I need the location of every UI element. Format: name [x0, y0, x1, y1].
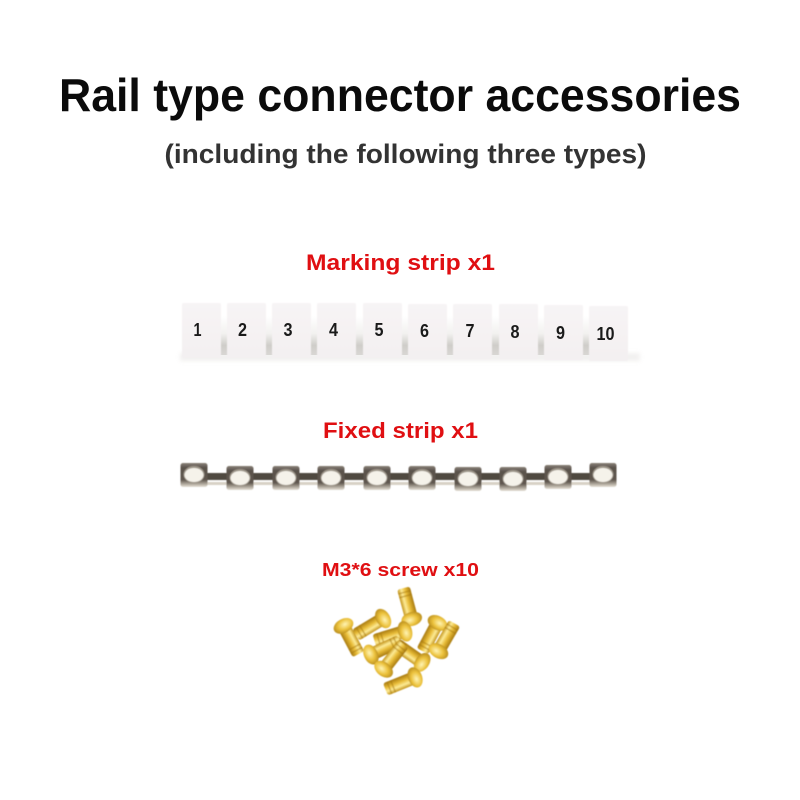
tile numbers: 1 [194, 320, 202, 340]
heading: screws: M3*6 screw x10 [322, 559, 479, 580]
heading: fixed strip: Fixed strip x1 [323, 418, 478, 443]
tile numbers: 2 [238, 320, 247, 340]
screws image [331, 585, 464, 699]
tile numbers: 7 [466, 321, 474, 341]
heading: marking strip: Marking strip x1 [306, 250, 495, 275]
tile numbers: 5 [374, 320, 384, 340]
marking strip image [180, 303, 640, 361]
subtitle: (including the following three types) [164, 139, 646, 169]
square links with holes [180, 463, 208, 487]
tile numbers: 9 [556, 323, 565, 343]
title: Rail type connector accessories [59, 69, 741, 121]
tile numbers: 3 [284, 320, 292, 340]
tile numbers [194, 320, 614, 344]
fixed strip image [180, 463, 616, 491]
tile numbers: 8 [510, 322, 520, 342]
tile numbers: 10 [596, 324, 614, 344]
tile numbers: 4 [329, 320, 338, 340]
connecting bar [195, 473, 615, 480]
tile numbers: 6 [420, 321, 429, 341]
tiles 1 to 10 [182, 303, 628, 361]
